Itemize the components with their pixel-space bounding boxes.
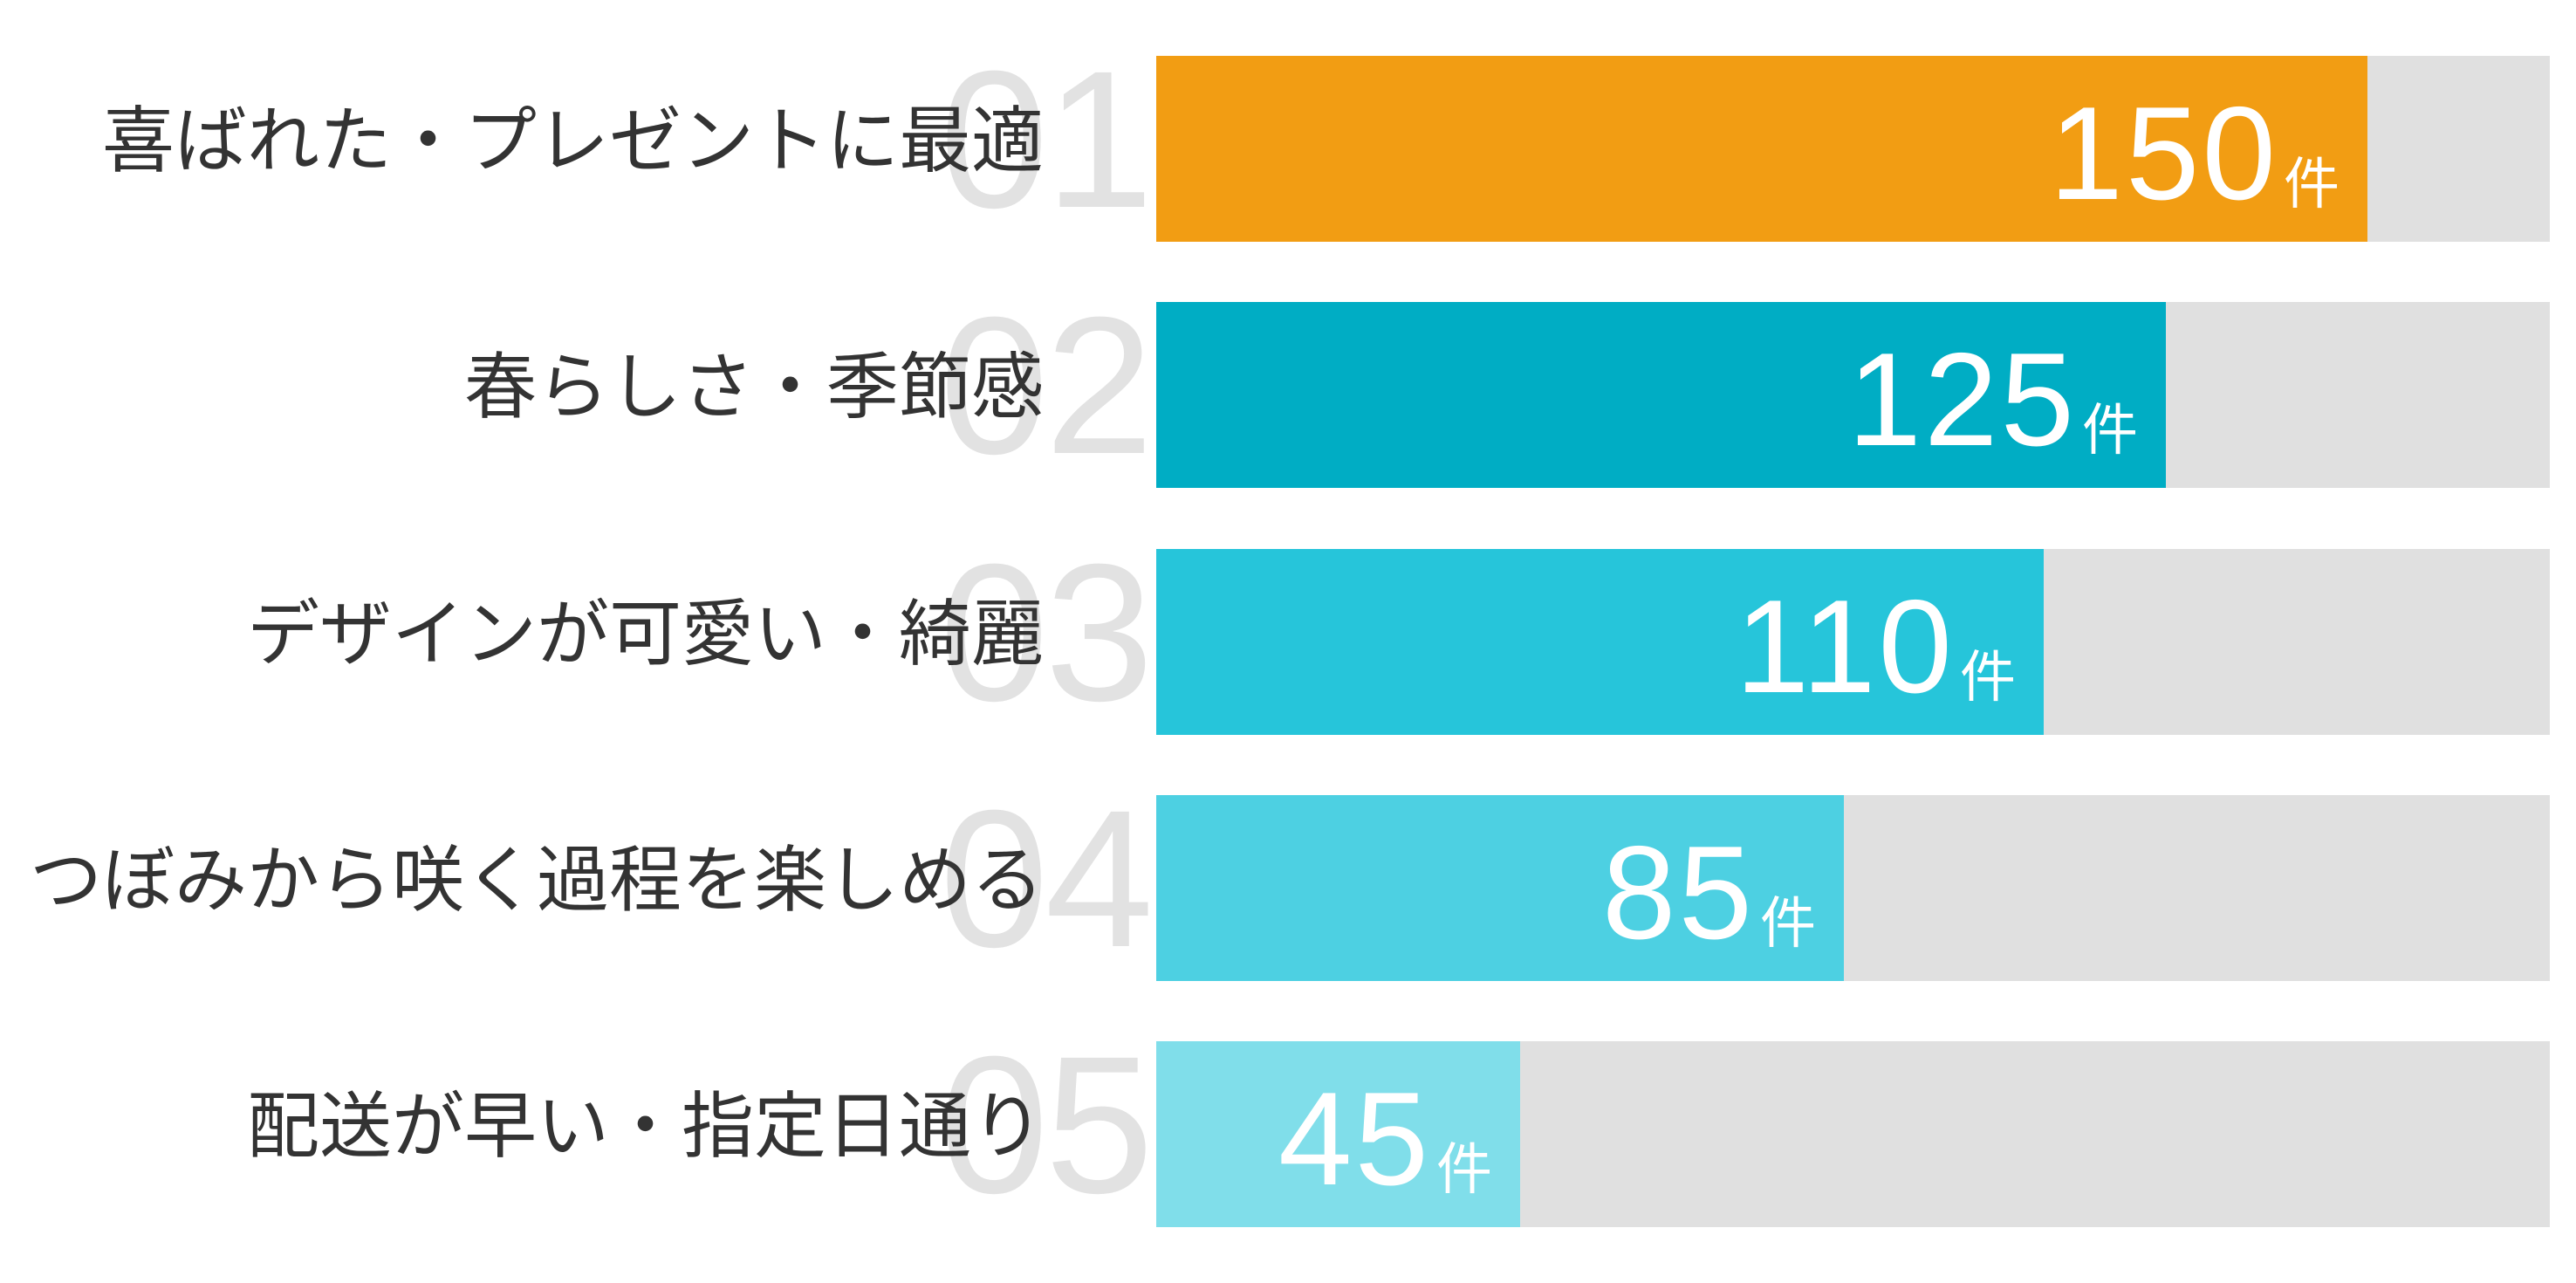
rank number 05: 05: [940, 1016, 1150, 1234]
label 1: 喜ばれた・プレゼントに最適: [102, 100, 1044, 182]
value 125: 件: [2082, 399, 2138, 462]
rank number 03: 03: [940, 524, 1150, 742]
row 5: [247, 1016, 2550, 1234]
bar: 150: [1156, 56, 2367, 242]
bar: 45: [1156, 1041, 1520, 1227]
value 85: 件: [1760, 892, 1816, 955]
row 2: [464, 277, 2550, 495]
label 4: つぼみから咲く過程を楽しめる: [30, 840, 1044, 921]
rank number 02: 02: [940, 277, 1150, 495]
value 45: 45: [1278, 1065, 1431, 1213]
label 5: 配送が早い・指定日通り: [247, 1086, 1044, 1167]
rank number 01: 01: [940, 31, 1150, 249]
row 4: [30, 770, 2550, 988]
label 3: デザインが可愛い・綺麗: [247, 593, 1044, 675]
rank number 04: 04: [940, 770, 1150, 988]
value 85: 85: [1602, 819, 1755, 967]
value 45: 件: [1436, 1138, 1492, 1201]
value 150: 150: [2049, 79, 2278, 228]
value 125: 125: [1847, 326, 2077, 474]
label 2: 春らしさ・季節感: [464, 346, 1044, 428]
row 3: [247, 524, 2550, 742]
bar: 110: [1156, 549, 2044, 735]
row 1: [102, 31, 2550, 249]
bar: 125: [1156, 302, 2166, 488]
value 110: 110: [1736, 573, 1955, 721]
value 110: 件: [1960, 646, 2016, 709]
bar: 85: [1156, 795, 1844, 981]
value 150: 件: [2284, 153, 2340, 216]
